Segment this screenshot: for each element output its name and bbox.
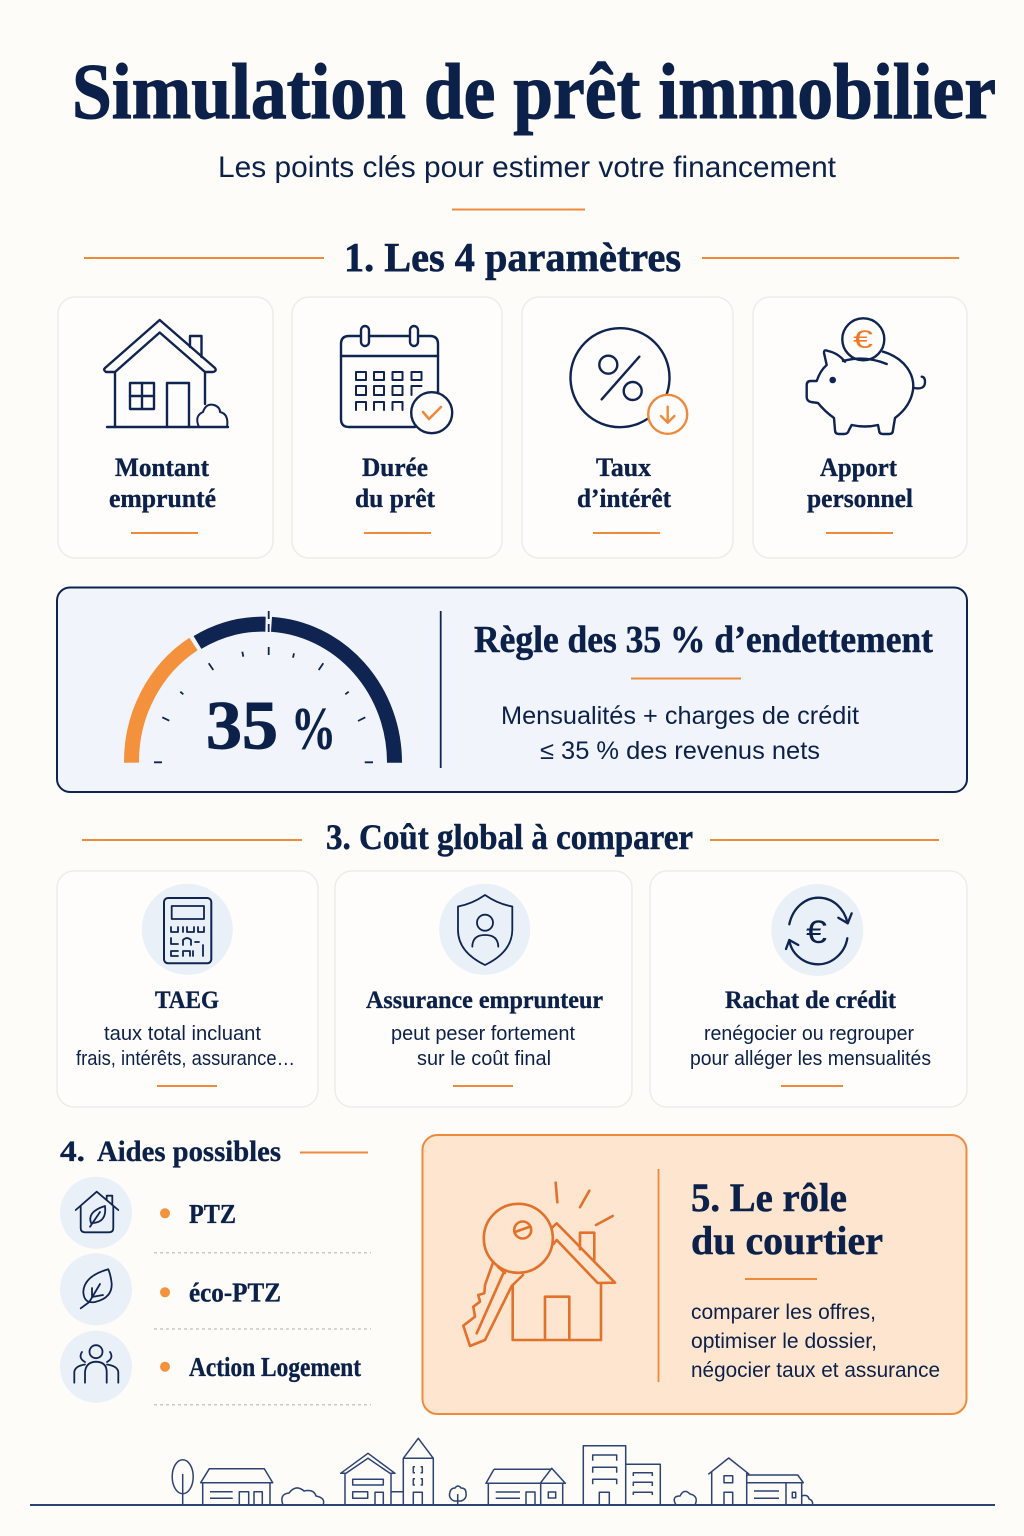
label [807,453,913,513]
heading [60,1135,368,1168]
panel: apport personnel [753,297,967,558]
text block [690,1023,931,1070]
text block: taux total incluant [104,1023,261,1045]
icon: leaf [60,1253,132,1325]
chart: gauge: % [291,696,336,762]
panel: durée du prêt [292,297,502,558]
label: personnel [807,484,913,513]
label: Montant [115,453,209,482]
heading [691,1175,883,1263]
text block [76,1023,295,1070]
text block [691,1300,940,1382]
heading: 4. [60,1135,85,1168]
label: Durée [362,453,428,482]
panel: taux d'intérêt [522,297,733,558]
list item: éco-PTZ [189,1278,281,1308]
icon: euro cycle [771,884,863,976]
panel: TAEG [57,871,318,1107]
icon: shield [439,884,530,975]
heading: TAEG [155,987,219,1014]
label: du prêt [355,484,435,513]
text block: sur le coût final [417,1048,551,1070]
text block: renégocier ou regrouper [704,1023,914,1045]
heading: 5. Le rôle [691,1175,847,1220]
heading: du courtier [691,1218,883,1263]
panel: règle des 35 % [57,588,967,792]
panel: rachat de crédit [650,871,967,1107]
icon: calculator [142,884,233,975]
text block: comparer les offres, [691,1300,876,1324]
label [577,453,671,513]
panel: assurance emprunteur [335,871,632,1107]
list item [160,1199,236,1229]
heading: Règle des 35 % d’endettement [474,619,933,661]
label: Taux [596,453,651,482]
text block: Mensualités + charges de crédit [501,702,859,730]
chart: gauge [131,611,395,764]
text block: peut peser fortement [391,1023,575,1045]
text block [501,702,859,765]
icon: euro cycle: € [806,914,827,950]
label: d’intérêt [577,484,671,513]
text block [391,1023,575,1070]
list item: Action Logement [189,1352,361,1382]
heading: Rachat de crédit [725,987,897,1014]
text block: négocier taux et assurance [691,1358,940,1382]
heading: Assurance emprunteur [366,987,603,1014]
text block: optimiser le dossier, [691,1329,877,1353]
text block: ≤ 35 % des revenus nets [540,737,820,765]
label: emprunté [109,484,216,513]
text block: pour alléger les mensualités [690,1048,931,1070]
label: Apport [820,453,897,482]
heading: Aides possibles [97,1135,281,1168]
icon: piggy bank [807,318,925,434]
heading: section 3: 3. Coût global à comparer [326,817,693,857]
subtitle: Les points clés pour estimer votre financement [218,151,837,184]
icon: euro coin symbol: € [853,326,873,354]
icon: calendar [341,326,452,433]
icon: people [60,1331,132,1403]
icon: house [104,320,228,427]
panel: montant emprunté [58,297,273,558]
icon: eco house [60,1177,132,1249]
label [109,453,216,513]
list item: PTZ [189,1199,236,1229]
icon: key and house [463,1183,615,1346]
icon: percent [570,328,687,434]
chart: gauge: 35 [206,688,278,764]
panel: le rôle du courtier [422,1135,966,1414]
text block: frais, intérêts, assurance… [76,1048,295,1070]
panel: aides possibles [60,1135,371,1405]
heading: section 1: 1. Les 4 paramètres [344,234,681,280]
label [355,453,435,513]
illustration: town skyline [30,1438,995,1505]
